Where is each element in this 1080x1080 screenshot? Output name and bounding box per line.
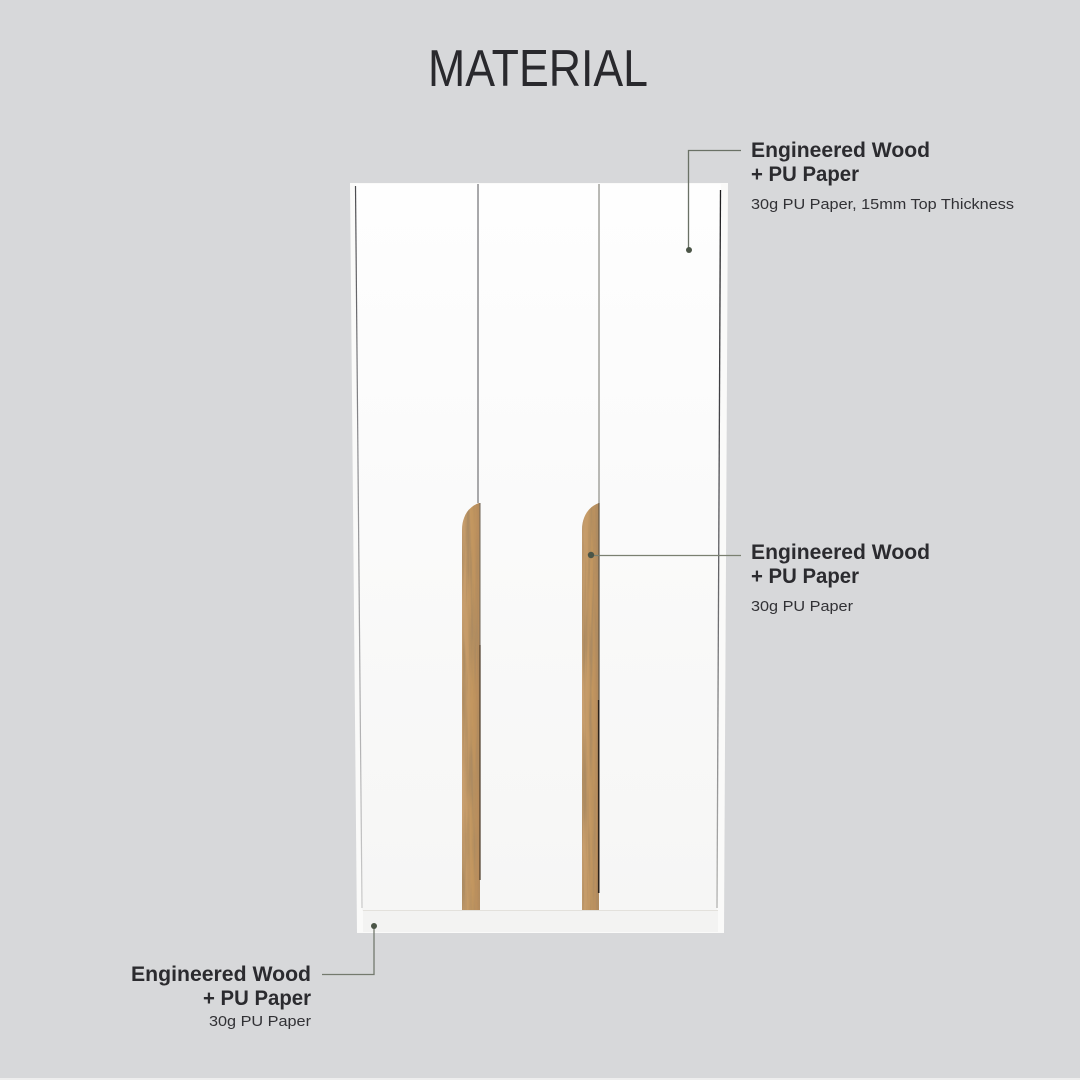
heading: Engineered Wood (131, 963, 311, 986)
callout: top panel (686, 139, 1014, 253)
leader line (591, 554, 741, 556)
heading: Engineered Wood (751, 139, 930, 162)
wardrobe (350, 183, 728, 933)
wardrobe side panels and plinth (350, 183, 728, 933)
leader line (322, 927, 374, 974)
left door (356, 184, 478, 911)
right door (600, 184, 721, 911)
door gaps (356, 184, 720, 910)
leader line (688, 150, 741, 249)
plinth (363, 911, 718, 932)
title: MATERIAL (428, 40, 648, 98)
detail: 30g PU Paper (751, 598, 853, 615)
callout: handle: + PU Paper (751, 565, 859, 588)
middle door (479, 184, 599, 911)
detail: 30g PU Paper (209, 1013, 311, 1030)
callout: plinth (131, 923, 377, 1030)
dot (686, 247, 692, 253)
detail: 30g PU Paper, 15mm Top Thickness (751, 196, 1014, 213)
callout: plinth: + PU Paper (203, 987, 311, 1010)
dot (588, 552, 594, 558)
dot (371, 923, 377, 929)
bottom edge strip (0, 1078, 1080, 1080)
callout: handle (588, 541, 930, 615)
left wood handle (462, 503, 480, 911)
heading: Engineered Wood (751, 541, 930, 564)
right wood handle (582, 503, 599, 911)
callout: top panel: + PU Paper (751, 163, 859, 186)
